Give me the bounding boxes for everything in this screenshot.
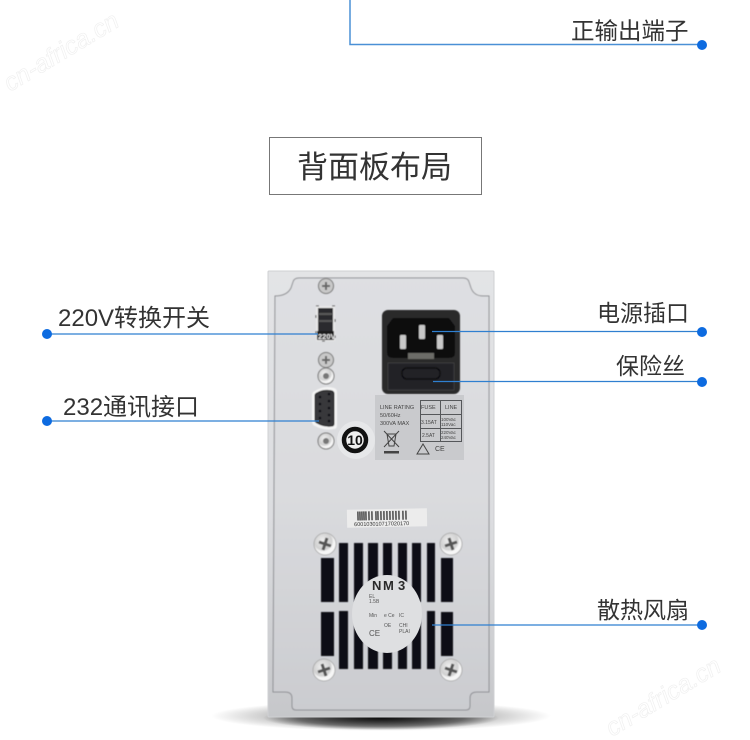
fan label small print: OE xyxy=(384,623,392,629)
rating label: LINE RATING xyxy=(380,405,414,411)
fan label small print: CHI xyxy=(399,623,408,629)
floor shadow xyxy=(211,701,551,731)
panel recess xyxy=(273,278,489,710)
fan label large print xyxy=(372,578,405,593)
callout: RS232 port: 232通讯接口 xyxy=(63,394,199,421)
rating label: 100Vac xyxy=(441,417,457,422)
top screw xyxy=(318,278,334,294)
rating label: 2.5AT xyxy=(422,433,435,439)
rating label xyxy=(375,395,464,460)
fan label small print: Min xyxy=(369,613,377,619)
fan label xyxy=(352,575,422,653)
rating label: 3.15AT xyxy=(421,420,437,426)
callout: positive output terminal: 正输出端子 xyxy=(571,18,688,44)
rocker switch 220V: 220V xyxy=(318,332,336,341)
fan label large print: 3 xyxy=(398,578,405,593)
rating label: LINE xyxy=(445,405,458,411)
callout: fuse: 保险丝 xyxy=(616,353,685,379)
icon: 10-year environmental mark xyxy=(337,421,375,459)
power inlet and fuse holder xyxy=(382,310,460,394)
callout: 220V switch xyxy=(42,305,318,339)
callout: 220V switch: 220V转换开关 xyxy=(58,305,210,332)
callout: RS232 port xyxy=(42,394,319,426)
barcode sticker xyxy=(347,508,427,528)
fan grille xyxy=(313,533,462,681)
fan label small print: 1.5B xyxy=(369,599,380,605)
rating label: CE xyxy=(435,446,445,453)
title: rear panel layout: 背面板布局 xyxy=(297,150,452,185)
callout: cooling fan xyxy=(432,597,707,630)
fan label large print: N xyxy=(372,578,381,593)
fan label small print: e Ce xyxy=(384,613,395,619)
icon: 10-year environmental mark: 10 xyxy=(347,432,363,448)
fan label large print: M xyxy=(383,578,394,593)
rating label: 110Vac xyxy=(441,422,456,427)
rating label: 50/60Hz xyxy=(380,413,401,419)
watermark: top left: cn-africa.cn xyxy=(0,7,124,97)
rating label: 300VA MAX xyxy=(380,421,410,427)
corner screws xyxy=(313,533,462,681)
panel body xyxy=(268,271,494,717)
barcode sticker: 600103010717020170 xyxy=(354,521,409,528)
fan label small print: IC xyxy=(399,613,404,619)
callout: power socket xyxy=(432,300,707,337)
vent slots xyxy=(321,543,453,669)
rating label: FUSE xyxy=(421,405,436,411)
fan label small print: CE xyxy=(369,629,380,638)
fan label small print xyxy=(369,594,410,638)
callout: cooling fan: 散热风扇 xyxy=(597,597,689,623)
DB9 serial port with screws xyxy=(312,352,337,449)
callout: power socket: 电源插口 xyxy=(597,300,689,326)
callout: fuse xyxy=(433,353,707,387)
callout: positive output terminal xyxy=(350,0,707,50)
fan label small print: EL xyxy=(369,594,375,600)
fan label small print: PLAI xyxy=(399,629,410,635)
rocker switch 220V xyxy=(316,306,336,341)
device rear panel xyxy=(211,271,551,731)
title: rear panel layout xyxy=(270,138,482,194)
watermark: bottom right: cn-africa.cn xyxy=(601,652,726,740)
rating label: 220Vac xyxy=(441,430,457,435)
rating label: 240Vac xyxy=(441,435,457,440)
